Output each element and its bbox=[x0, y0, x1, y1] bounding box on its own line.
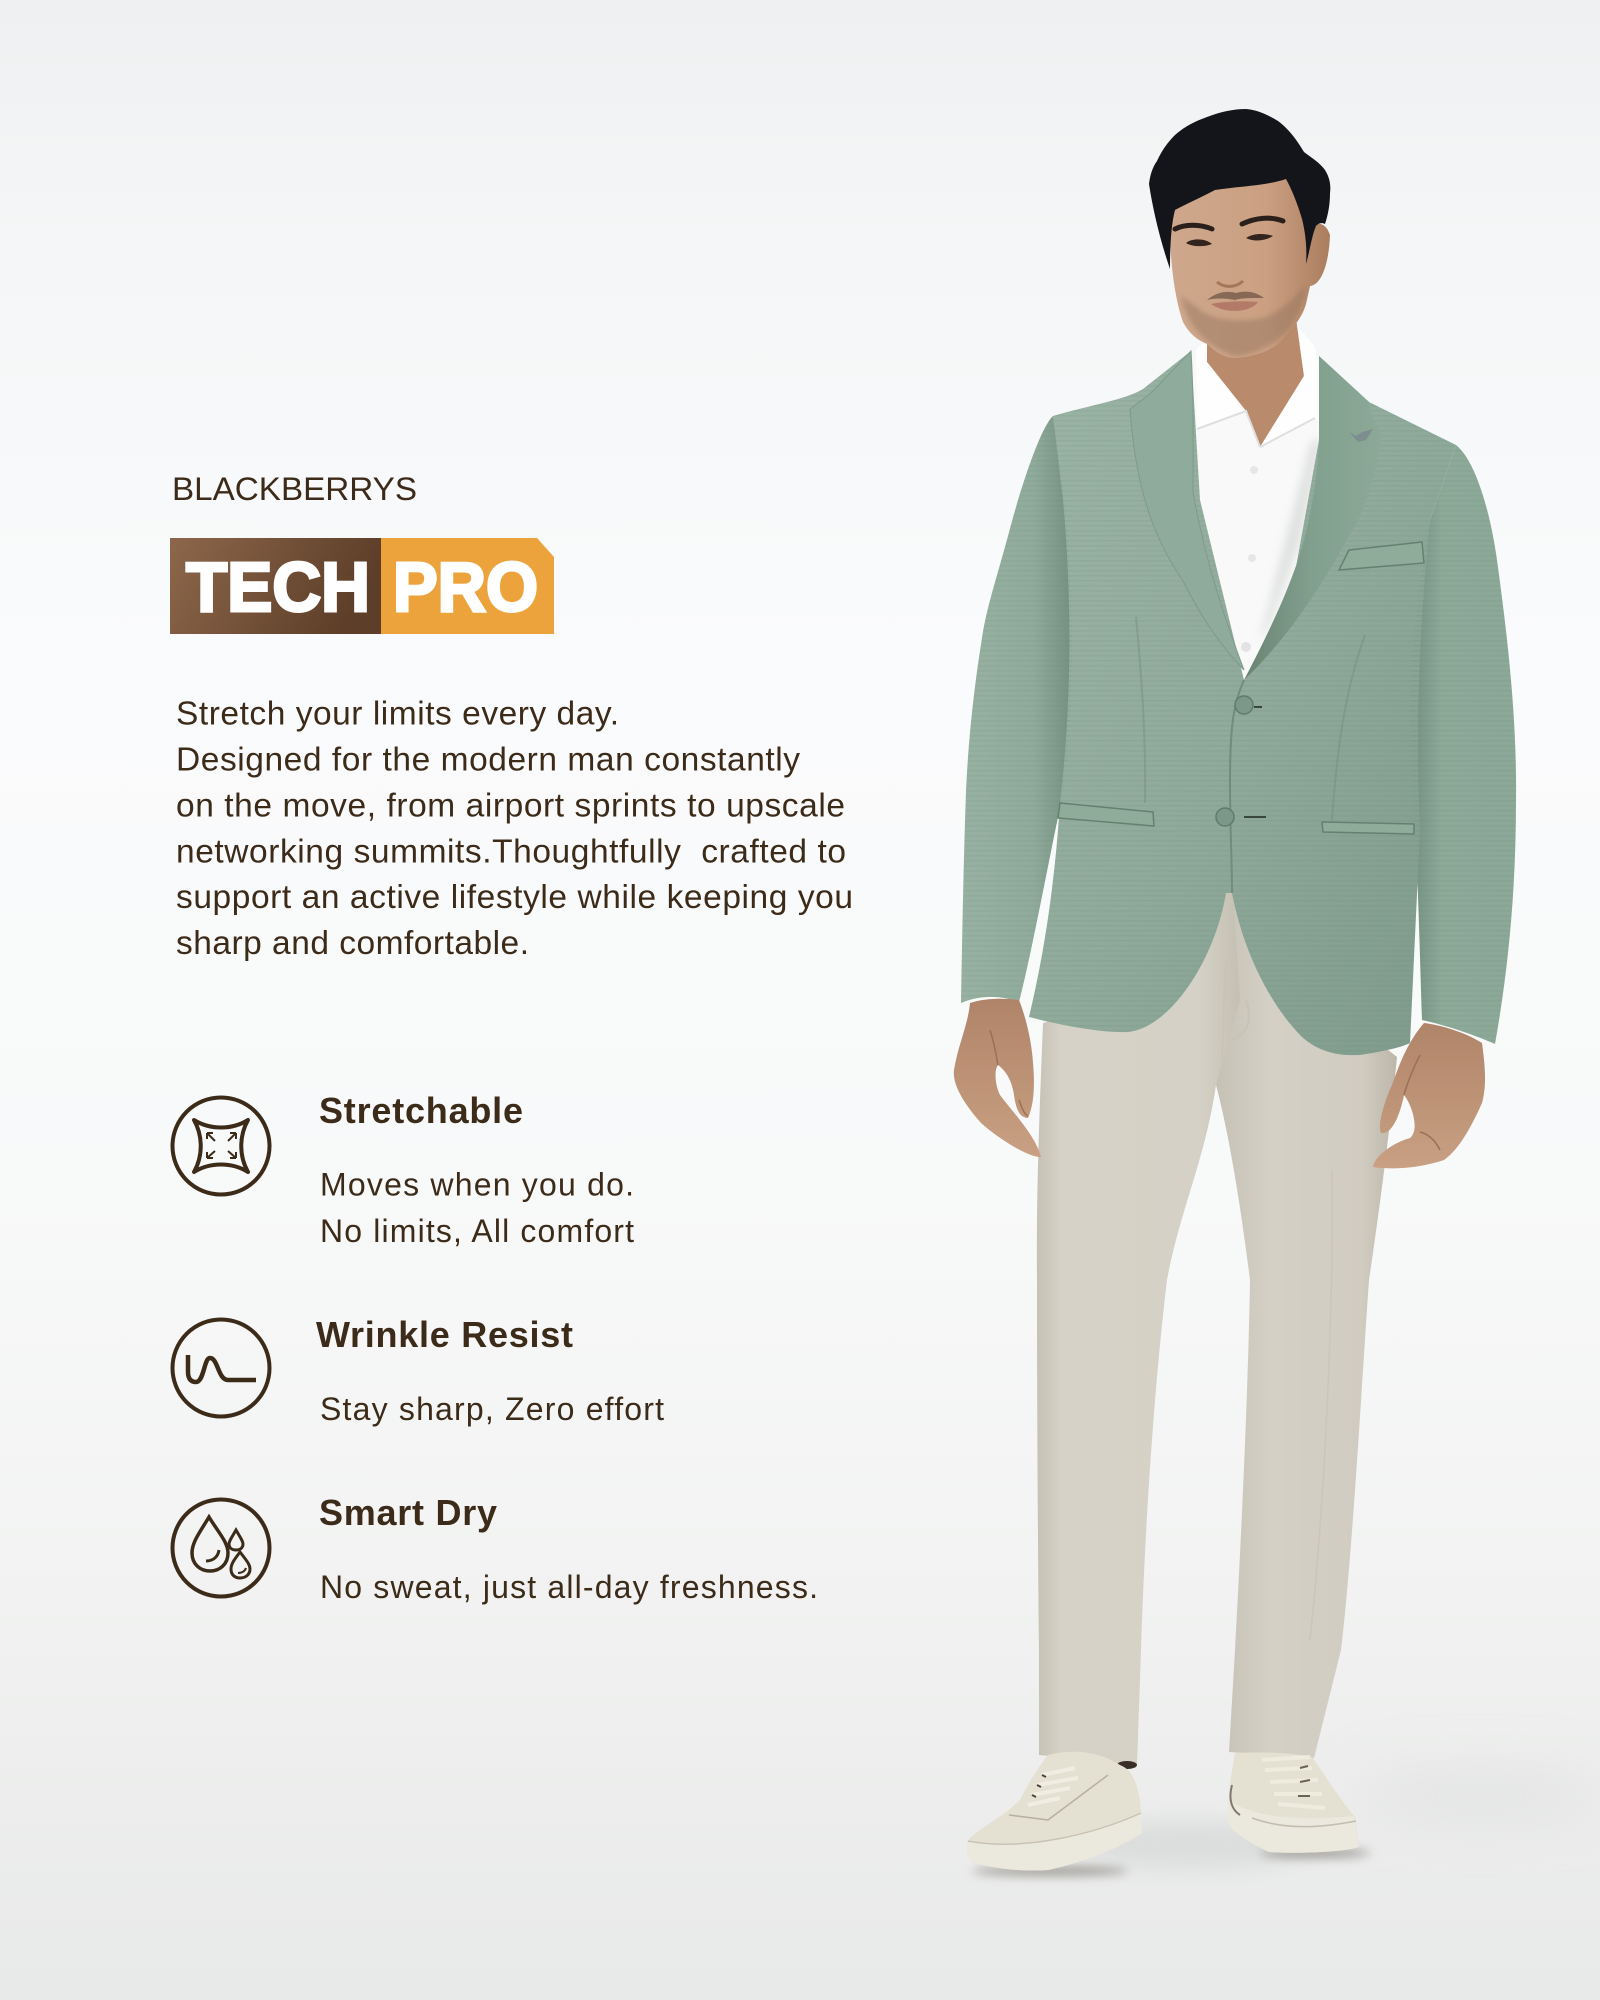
intro paragraph: on the move, from airport sprints to upscale bbox=[176, 788, 845, 824]
head bbox=[1149, 109, 1330, 358]
intro paragraph: sharp and comfortable. bbox=[176, 925, 529, 962]
jacket body bbox=[1029, 351, 1456, 1055]
feature: stretchable: Stretchable bbox=[319, 1090, 523, 1131]
neck bbox=[1207, 318, 1304, 447]
hair bbox=[1149, 109, 1330, 269]
icon: smart dry bbox=[172, 1500, 270, 1596]
intro paragraph bbox=[176, 696, 853, 962]
jacket seams and front edge bbox=[1136, 617, 1365, 893]
feature: stretchable: Moves when you do. bbox=[320, 1166, 634, 1202]
intro paragraph: Stretch your limits every day. bbox=[176, 696, 619, 732]
right shoe bbox=[1228, 1752, 1359, 1853]
jacket sleeve left bbox=[961, 416, 1072, 1003]
logo: TECH PRO bbox=[170, 538, 554, 634]
feature: wrinkle resist bbox=[316, 1314, 664, 1427]
stubble bbox=[1181, 285, 1306, 356]
left lapel bbox=[1130, 351, 1244, 670]
eyes bbox=[1186, 234, 1273, 246]
mustache bbox=[1207, 292, 1264, 300]
feature: smart dry bbox=[319, 1492, 818, 1605]
right lapel bbox=[1244, 356, 1381, 680]
floor shadows bbox=[972, 1779, 1600, 1876]
intro paragraph: Designed for the modern man constantly bbox=[176, 742, 800, 778]
mouth bbox=[1211, 301, 1258, 311]
intro paragraph: networking summits.Thoughtfully crafted to bbox=[176, 834, 846, 870]
shirt bbox=[1193, 318, 1333, 680]
trousers bbox=[1037, 880, 1397, 1765]
icon: stretchable bbox=[172, 1098, 270, 1194]
feature: stretchable bbox=[319, 1090, 634, 1249]
buttons bbox=[1216, 696, 1266, 826]
feature: wrinkle resist: Stay sharp, Zero effort bbox=[320, 1391, 664, 1427]
left shoe bbox=[967, 1752, 1142, 1871]
jacket sleeve right bbox=[1411, 445, 1516, 1044]
logo: TECH PRO: TECH bbox=[186, 548, 370, 626]
brand name: BLACKBERRYS bbox=[172, 471, 417, 507]
feature: wrinkle resist: Wrinkle Resist bbox=[316, 1314, 573, 1355]
lapel pin bbox=[1349, 429, 1373, 442]
model photo illustration bbox=[954, 109, 1516, 1871]
left hand bbox=[954, 999, 1041, 1157]
feature: smart dry: Smart Dry bbox=[319, 1492, 497, 1533]
feature: stretchable: No limits, All comfort bbox=[320, 1213, 634, 1249]
nose bbox=[1217, 281, 1243, 286]
intro paragraph: support an active lifestyle while keeping you bbox=[176, 879, 853, 916]
pockets bbox=[1058, 542, 1424, 834]
icon: wrinkle resist bbox=[172, 1320, 270, 1416]
right hand bbox=[1373, 1023, 1485, 1168]
fabric rib texture bbox=[961, 351, 1516, 1055]
feature: smart dry: No sweat, just all-day freshness. bbox=[320, 1569, 818, 1605]
logo: TECH PRO: PRO bbox=[393, 548, 538, 626]
eyebrows bbox=[1175, 218, 1283, 229]
